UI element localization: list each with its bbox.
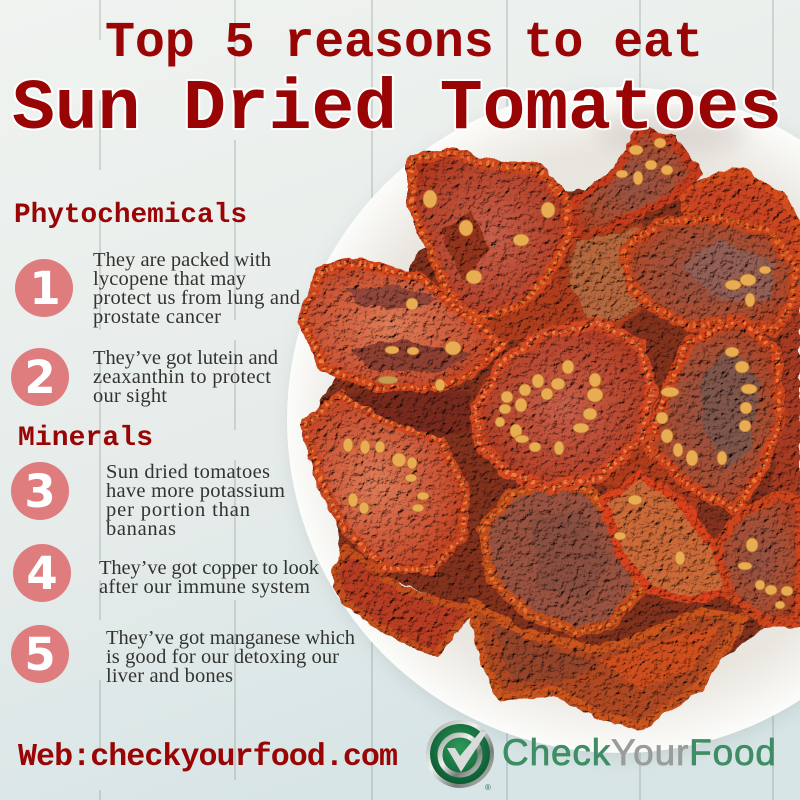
reason 5: is good for our detoxing our — [106, 646, 339, 668]
dark inner patch of right middle slice — [680, 240, 775, 300]
tomato: top right slice — [572, 130, 698, 238]
reason 3: per portion than — [106, 499, 250, 521]
white bowl — [287, 87, 800, 757]
heading: Phytochemicals: Phytochemicals — [14, 200, 247, 231]
tomato: brown fold on bottom slice — [495, 625, 600, 682]
tomato: bottom slice — [472, 602, 746, 726]
tomato: bottom left slice — [334, 548, 472, 654]
website address: Web:checkyourfood.com — [18, 739, 398, 775]
dark inner patches of left slice — [345, 285, 440, 310]
dark patch on lower centre slice — [530, 510, 610, 600]
tomato: back centre slice — [565, 225, 650, 325]
tomato: orange fold on bottom slice — [600, 625, 720, 690]
reason 1: They are packed with — [93, 249, 271, 271]
tomato: centre seeded slice — [476, 324, 652, 488]
tomato seeds — [343, 138, 793, 609]
logo: CheckYourFood — [426, 720, 776, 792]
tomato: far right slice — [716, 495, 800, 622]
reason 5: 5 — [24, 628, 56, 681]
tomato: lower right of centre — [604, 475, 735, 600]
tomato: right middle slice — [624, 218, 796, 330]
reason 2: our sight — [93, 385, 167, 407]
main title: Sun Dried Tomatoes: Sun Dried Tomatoes — [12, 69, 782, 150]
dark hollow in top centre slice — [440, 210, 490, 280]
reason 1: 1 — [29, 262, 61, 315]
reason 1: prostate cancer — [93, 306, 221, 328]
tomato: left slice — [302, 262, 502, 388]
tomato: filler between slices — [470, 250, 590, 345]
reason 3: 3 — [24, 465, 56, 518]
pile of sun dried tomatoes — [302, 130, 800, 726]
reason 3: have more potassium — [106, 480, 285, 502]
reason 3 — [11, 461, 285, 540]
reason 2 — [11, 347, 278, 407]
reason 4 — [13, 544, 320, 602]
tomato: right standing slice — [648, 320, 780, 510]
tomato: upper right curl — [680, 170, 800, 300]
reason 5: They’ve got manganese which — [106, 627, 355, 649]
reason 5: liver and bones — [106, 665, 233, 687]
reason 4: 4 — [26, 547, 58, 600]
icon: check mark badge: ® — [485, 783, 491, 792]
reason 2: zeaxanthin to protect — [93, 366, 271, 388]
reason 5 — [11, 625, 355, 687]
tomato: top centre slice — [412, 152, 568, 320]
reason 2: 2 — [24, 351, 56, 404]
tomato: dark slice under left — [345, 385, 470, 438]
reason 3: bananas — [106, 518, 176, 540]
reason 1 — [15, 249, 300, 328]
reason 3: Sun dried tomatoes — [106, 461, 270, 483]
tomato: lower centre slice — [482, 482, 640, 632]
tomato: lower left slice — [305, 395, 465, 570]
dark inner patch of right standing slice — [700, 345, 760, 470]
reason 1: protect us from lung and — [93, 287, 300, 309]
reason 2: They’ve got lutein and — [93, 347, 278, 369]
shadow mass under tomatoes — [320, 190, 800, 690]
logo wordmark: CheckYourFood — [502, 732, 776, 773]
heading: Minerals: Minerals — [18, 423, 153, 454]
title line: Top 5 reasons to eat: Top 5 reasons to eat — [105, 15, 703, 72]
reason 1: lycopene that may — [93, 268, 247, 290]
icon: check mark badge — [426, 720, 494, 792]
reason 4: after our immune system — [99, 576, 310, 598]
reason 4: They’ve got copper to look — [99, 557, 320, 579]
